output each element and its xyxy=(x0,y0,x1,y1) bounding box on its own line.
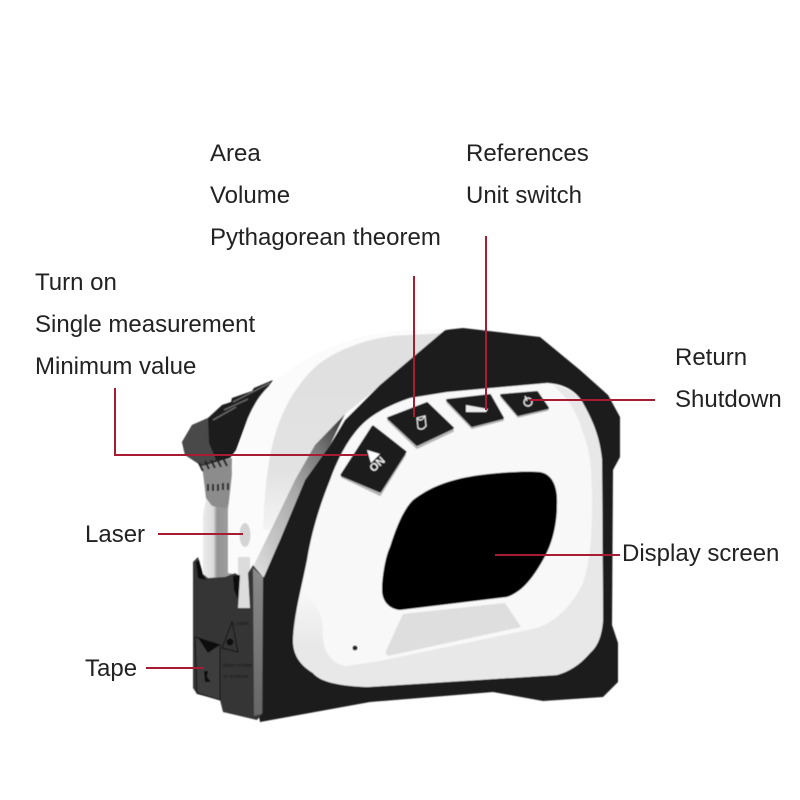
label: turn on, single measurement, minimum value xyxy=(35,269,255,380)
line: turn on xyxy=(115,388,367,455)
line: return xyxy=(530,399,655,401)
line: laser xyxy=(158,533,243,535)
button: area and volume xyxy=(388,403,453,448)
label: references, unit switch xyxy=(466,140,589,209)
white front face xyxy=(293,383,603,687)
label: turn on, single measurement, minimum value: Turn on xyxy=(35,269,117,296)
line: tape xyxy=(146,667,204,669)
warning text: AT STREAM xyxy=(223,674,249,679)
device: laser tape measure xyxy=(182,328,620,722)
grey trapezoid panel xyxy=(386,603,521,656)
label: area, volume, Pythagorean theorem: Area xyxy=(210,140,261,167)
warning text: LASER xyxy=(234,621,250,626)
warning text xyxy=(223,621,252,679)
label: tape: Tape xyxy=(85,655,137,682)
buttons xyxy=(342,392,548,495)
callout lines xyxy=(115,236,655,668)
grey stripe beside black band xyxy=(253,414,345,577)
button: power xyxy=(501,392,548,417)
label: area, volume, Pythagorean theorem xyxy=(210,140,441,251)
line: display screen xyxy=(495,554,620,556)
label: references, unit switch: Unit switch xyxy=(466,182,582,209)
line: area xyxy=(413,276,415,417)
laser warning triangle xyxy=(222,622,238,652)
black outer body xyxy=(256,328,620,722)
label: return, shutdown: Return xyxy=(675,344,747,371)
label: return, shutdown: Shutdown xyxy=(675,386,782,413)
label: area, volume, Pythagorean theorem: Pythagorean theorem xyxy=(210,224,441,251)
label: references, unit switch: References xyxy=(466,140,589,167)
button: ON xyxy=(342,427,405,495)
line: references xyxy=(485,236,487,410)
laser aperture xyxy=(240,523,250,547)
tape door xyxy=(195,637,220,700)
button: ON: ON xyxy=(368,455,388,475)
label: area, volume, Pythagorean theorem: Volume xyxy=(210,182,290,209)
label: turn on, single measurement, minimum value: Single measurement xyxy=(35,311,255,338)
label: return, shutdown xyxy=(675,344,782,413)
grey shading on housing xyxy=(263,333,445,530)
soft fade of left face shading xyxy=(294,590,326,645)
label: turn on, single measurement, minimum value: Minimum value xyxy=(35,353,196,380)
lower left black case xyxy=(193,557,263,720)
rear grip column xyxy=(182,380,273,582)
grey shading on face edge xyxy=(293,385,603,687)
indicator dot xyxy=(352,646,358,650)
label: laser: Laser xyxy=(85,521,145,548)
label: display screen: Display screen xyxy=(622,540,779,567)
button: references xyxy=(447,395,503,428)
display screen xyxy=(382,472,557,610)
warning text: DON'T STARE xyxy=(223,663,252,668)
white upper housing xyxy=(228,329,470,575)
